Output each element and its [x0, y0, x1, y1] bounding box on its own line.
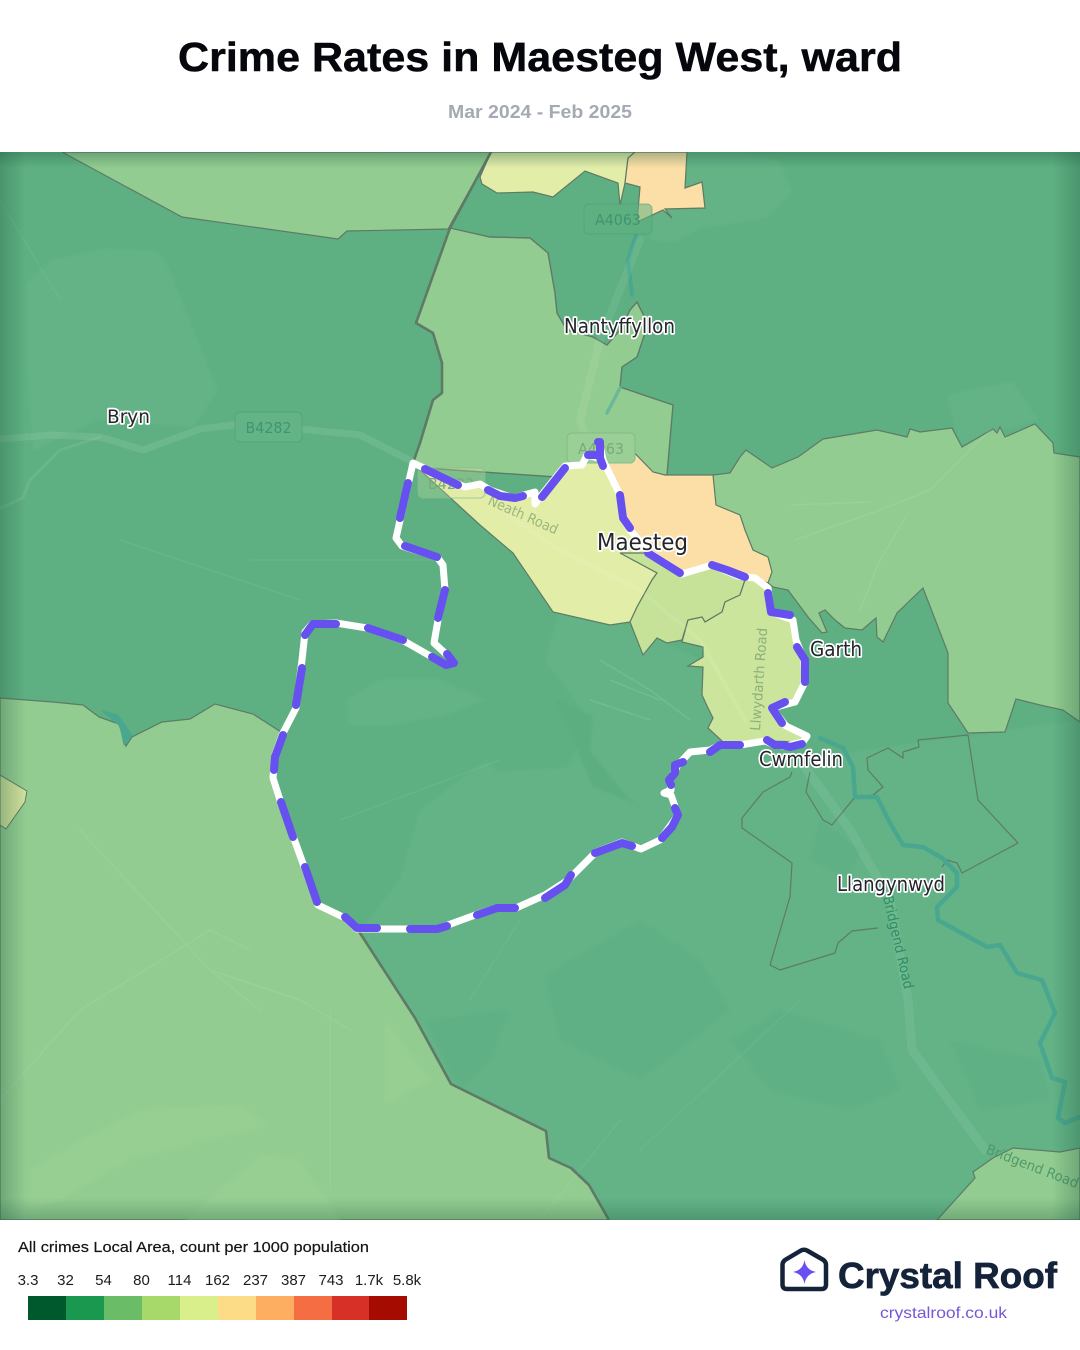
Maesteg West ward boundary: white line — [273, 445, 807, 929]
Maesteg West ward boundary: purple dashes — [274, 442, 805, 929]
legend tick labels: 114 — [168, 1272, 191, 1289]
road label: Neath Road: Neath Road — [485, 493, 560, 538]
icon: house with star — [782, 1250, 826, 1289]
ward: east — [700, 424, 1080, 733]
map edge shading — [0, 152, 1080, 1220]
ward: bottom right — [937, 1148, 1080, 1220]
road shield: B4282 centre — [418, 468, 485, 498]
ward: north-west band — [62, 152, 491, 239]
road label: Llwydarth Road: Llwydarth Road — [748, 627, 771, 731]
legend tick labels: 3.3 — [18, 1272, 38, 1289]
road shield: B4282 west: B4282 — [246, 419, 292, 437]
place label: Llangynwyd: Llangynwyd — [837, 872, 945, 896]
legend tick labels: 5.8k — [393, 1272, 422, 1289]
ward: Maesteg West pale — [413, 455, 657, 625]
road shield: A4063 north — [584, 204, 652, 234]
legend tick labels: 1.7k — [355, 1272, 384, 1289]
place label: Maesteg: Maesteg — [597, 530, 688, 556]
ward: Llwydarth mid green — [682, 578, 807, 745]
legend tick labels — [18, 1272, 422, 1289]
road shield: B4282 west — [235, 412, 302, 442]
subtitle: date range: Mar 2024 - Feb 2025 — [448, 102, 632, 122]
panel: choropleth map — [0, 152, 1080, 1220]
road shield: A4063 centre — [567, 433, 635, 463]
legend tick labels: 54 — [95, 1272, 112, 1289]
place label: Cwmfelin: Cwmfelin — [759, 747, 843, 771]
ward: Maesteg orange — [608, 453, 773, 583]
place label: Bryn: Bryn — [107, 406, 150, 428]
lighter fields in the south-west ward — [186, 1219, 340, 1220]
legend colour bar — [28, 1296, 407, 1320]
place label: Garth: Garth — [810, 637, 862, 661]
road shield: A4063 centre: A4063 — [578, 440, 624, 458]
website: crystalroof.co.uk — [880, 1305, 1008, 1322]
legend: colour scale — [18, 1272, 422, 1320]
road shield: B4282 centre: B4282 — [428, 475, 474, 493]
road shield: A4063 north: A4063 — [595, 211, 641, 229]
ward: south-west — [0, 698, 609, 1220]
ward: pale north — [480, 152, 635, 205]
terrain: lighter and darker land cover — [27, 152, 1080, 1220]
river — [102, 235, 1080, 1123]
legend title: All crimes Local Area, count per 1000 population — [18, 1239, 369, 1256]
ward: Nantyffyllon — [413, 228, 673, 480]
ward: small pale area at left edge — [0, 775, 27, 829]
legend tick labels: 387 — [281, 1272, 306, 1289]
place label: Nantyffyllon: Nantyffyllon — [564, 314, 675, 338]
legend tick labels: 162 — [205, 1272, 230, 1289]
ward boundary lines — [358, 152, 1018, 1220]
logo wordmark: Crystal Roof — [838, 1255, 1058, 1296]
roads — [0, 200, 990, 1220]
road label: Bridgend Road north: Bridgend Road — [879, 894, 916, 990]
legend tick labels: 237 — [243, 1272, 268, 1289]
title: Crime Rates in Maesteg West, ward — [178, 34, 902, 80]
logo: Crystal Roof — [782, 1250, 1058, 1322]
ward: orange north — [625, 152, 705, 222]
ward: south Maesteg mid green — [620, 553, 745, 655]
legend tick labels: 743 — [318, 1272, 344, 1289]
legend tick labels: 80 — [133, 1272, 150, 1289]
legend tick labels: 32 — [57, 1272, 74, 1289]
